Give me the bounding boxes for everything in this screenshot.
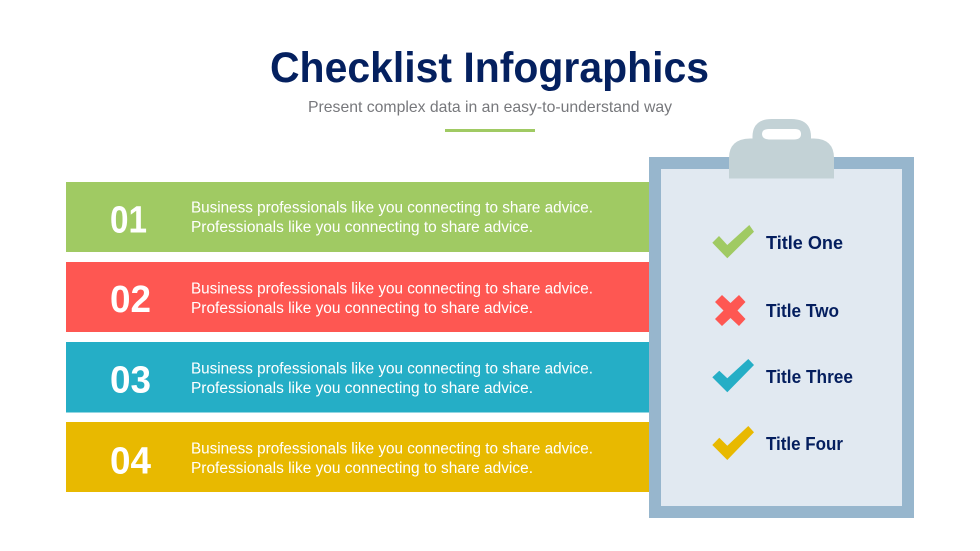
- clipboard clip: [729, 119, 834, 178]
- row 02: [66, 262, 649, 332]
- subtitle: Present complex data in an easy-to-understand way: [308, 99, 672, 116]
- icon: red cross: [715, 295, 746, 326]
- row 01 text: [191, 200, 593, 236]
- row 04 text: Business professionals like you connecting to share advice.: [191, 440, 593, 458]
- clipboard board: [649, 157, 914, 518]
- row 01 text: Business professionals like you connecting to share advice.: [191, 200, 593, 216]
- icon: yellow check: [712, 426, 754, 460]
- number 01: 01: [110, 200, 147, 242]
- row 03 text: Professionals like you connecting to share advice.: [191, 380, 533, 397]
- item: Title Four: Title Four: [766, 434, 843, 454]
- icon: green check: [712, 225, 754, 258]
- title: Checklist Infographics: [270, 44, 709, 92]
- row 02 text: Professionals like you connecting to share advice.: [191, 300, 533, 317]
- item: Title One: Title One: [766, 233, 843, 253]
- number 02: 02: [110, 279, 151, 321]
- clipboard: [649, 119, 914, 518]
- row 02 text: [191, 280, 593, 317]
- row 03: [66, 342, 649, 412]
- row 04 text: Professionals like you connecting to share advice.: [191, 460, 533, 477]
- row 01: [66, 182, 649, 252]
- row 04 text: [191, 440, 593, 477]
- clipboard paper: [661, 169, 902, 506]
- row 02 text: Business professionals like you connecting to share advice.: [191, 280, 593, 298]
- item: Title Two: Title Two: [766, 301, 839, 321]
- number 03: 03: [110, 360, 151, 402]
- number 04: 04: [110, 440, 151, 482]
- row 04: [66, 422, 649, 492]
- item: Title Three: Title Three: [766, 367, 853, 387]
- icon: blue check: [712, 359, 754, 392]
- row 03 text: Business professionals like you connecting to share advice.: [191, 360, 593, 378]
- title underline: [445, 129, 535, 132]
- row 03 text: [191, 360, 593, 397]
- row 01 text: Professionals like you connecting to share advice.: [191, 219, 533, 236]
